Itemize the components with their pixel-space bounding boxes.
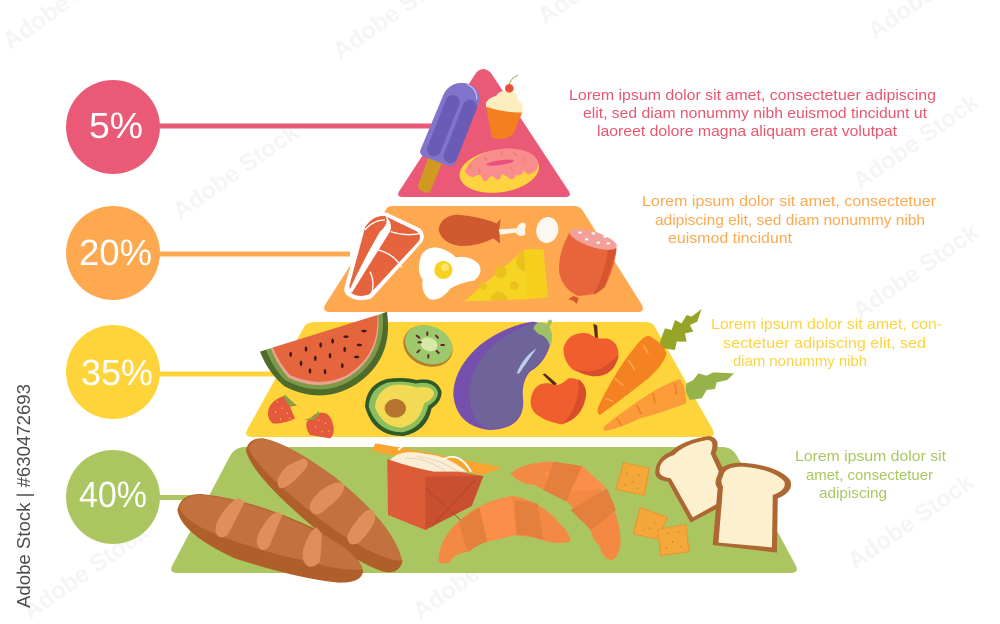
text block: sweets: Lorem ipsum dolor sit amet, consectetuer adipiscing (569, 87, 936, 104)
icon: crackers (616, 463, 689, 556)
faint background watermarks: Adobe Stock (848, 218, 984, 325)
icon: croissant upper (510, 462, 621, 560)
icon: donut (457, 144, 542, 198)
icon: popsicle (418, 83, 479, 193)
text block: grains (795, 448, 947, 502)
icon: fried egg (419, 247, 481, 300)
badge: 5% (66, 80, 160, 174)
icon: avocado (365, 378, 442, 436)
text block: grains: adipiscing (819, 485, 887, 502)
sweets foods (418, 75, 542, 198)
badge: 40% (66, 450, 160, 544)
badge: 35% (66, 325, 160, 419)
faint background watermarks: Adobe Stock (848, 88, 984, 195)
icon: bread slice back (655, 436, 730, 523)
badge: 35%: 35% (81, 352, 153, 393)
badge: 40%: 40% (79, 474, 147, 515)
badge: 20%: 20% (79, 232, 152, 273)
pyramid tier: grains (171, 447, 797, 573)
icon: cupcake (485, 75, 523, 139)
text block: grains: amet, consectetuer (806, 467, 933, 484)
text block: fruit and vegetables: diam nonummy nibh (733, 353, 867, 370)
icon: strawberry right (304, 410, 334, 438)
icon: eggplant (453, 322, 552, 430)
badge: 20% (66, 206, 160, 300)
text block: protein: adipiscing elit, sed diam nonummy nibh (655, 212, 925, 229)
pyramid tier: sweets (398, 69, 570, 197)
pyramid tier: protein (324, 206, 643, 312)
fruit and vegetable foods (260, 309, 734, 438)
text block: grains: Lorem ipsum dolor sit (795, 448, 947, 465)
icon: apple upper (563, 324, 618, 376)
icon: baguette upper (246, 438, 403, 572)
icon: egg (534, 215, 561, 245)
icon: baguette lower (177, 494, 363, 583)
text block: protein (642, 193, 936, 247)
icon: sausage (559, 224, 619, 304)
text block: sweets: laoreet dolore magna aliquam erat volutpat (597, 123, 898, 140)
icon: kiwi (397, 318, 459, 374)
pyramid tier: fruit and vegetables (246, 322, 714, 437)
text block: protein: Lorem ipsum dolor sit amet, consectetuer (642, 193, 936, 210)
icon: noodle box (371, 443, 502, 530)
faint background watermarks: Adobe Stock (408, 518, 544, 624)
icon: bread slice front (713, 463, 791, 553)
icon: croissant lower (439, 496, 570, 564)
icon: carrot upper (597, 309, 702, 415)
text block: fruit and vegetables: Lorem ipsum dolor sit amet, con- (711, 316, 942, 333)
protein foods (344, 212, 619, 304)
icon: carrot lower (603, 372, 734, 431)
connector lines (150, 124, 435, 500)
icon: chicken leg (439, 215, 526, 246)
text block: fruit and vegetables (711, 316, 942, 370)
text block: protein: euismod tincidunt (668, 230, 793, 247)
faint background watermarks: Adobe Stock (18, 518, 154, 624)
badge: 5%: 5% (89, 105, 143, 146)
text block: fruit and vegetables: sectetuer adipiscing elit, sed (723, 335, 926, 352)
icon: strawberry left (268, 394, 297, 424)
text block: sweets: elit, sed diam nonummy nibh euismod tincidunt ut (583, 105, 928, 122)
text block: sweets (569, 87, 936, 140)
grain foods (177, 436, 791, 583)
icon: watermelon (260, 312, 388, 395)
icon: cheese (464, 249, 548, 301)
icon: steak (344, 212, 424, 300)
stock watermark label: Adobe Stock | #630472693 (14, 384, 34, 608)
faint background watermarks: Adobe Stock (168, 118, 304, 225)
icon: apple lower (531, 373, 586, 424)
faint background watermarks: Adobe Stock (843, 468, 979, 575)
